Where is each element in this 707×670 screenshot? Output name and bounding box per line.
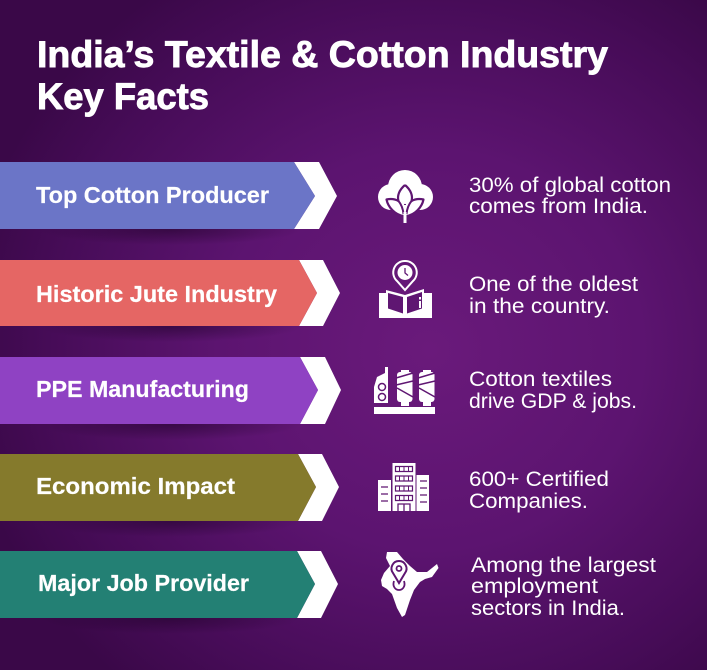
title: India’s Textile & Cotton Industry xyxy=(37,34,608,75)
text: cotton fact xyxy=(469,174,671,218)
text: economic fact: 600+ Certified xyxy=(469,468,609,491)
icon: city buildings xyxy=(378,463,429,511)
banner: Historic Jute Industry: Historic Jute Industry xyxy=(36,281,277,307)
text: PPE fact xyxy=(469,368,637,413)
text: economic fact xyxy=(469,468,609,513)
text: cotton fact: 30% of global cotton xyxy=(469,174,671,197)
banner: Top Cotton Producer: Top Cotton Producer xyxy=(36,182,269,208)
text: jute fact: One of the oldest xyxy=(469,273,638,296)
banner: PPE Manufacturing: PPE Manufacturing xyxy=(36,376,249,402)
icon: thread spools machine xyxy=(374,367,435,414)
text: jobs fact: Among the largest xyxy=(471,554,656,577)
text: jute fact xyxy=(469,273,638,318)
text: jobs fact xyxy=(471,554,656,620)
text: jute fact: in the country. xyxy=(469,295,610,318)
banner: PPE Manufacturing xyxy=(0,357,341,440)
banner: Historic Jute Industry xyxy=(0,260,340,342)
icon: India map with pin xyxy=(381,552,438,617)
banner: Major Job Provider xyxy=(0,551,338,634)
text: PPE fact: Cotton textiles xyxy=(469,368,612,391)
icon: book with clock pin xyxy=(379,261,432,318)
banner: Top Cotton Producer xyxy=(0,162,337,245)
banner: Economic Impact: Economic Impact xyxy=(36,473,235,499)
text: economic fact: Companies. xyxy=(469,490,588,513)
title: Key Facts xyxy=(37,76,209,117)
banner: Economic Impact xyxy=(0,454,339,537)
banner: Major Job Provider: Major Job Provider xyxy=(38,570,249,596)
title xyxy=(37,34,608,117)
text: PPE fact: drive GDP & jobs. xyxy=(469,390,637,413)
text: jobs fact: sectors in India. xyxy=(471,597,625,620)
text: jobs fact: employment xyxy=(471,575,598,598)
icon: cotton boll xyxy=(378,170,433,223)
text: cotton fact: comes from India. xyxy=(469,195,648,218)
